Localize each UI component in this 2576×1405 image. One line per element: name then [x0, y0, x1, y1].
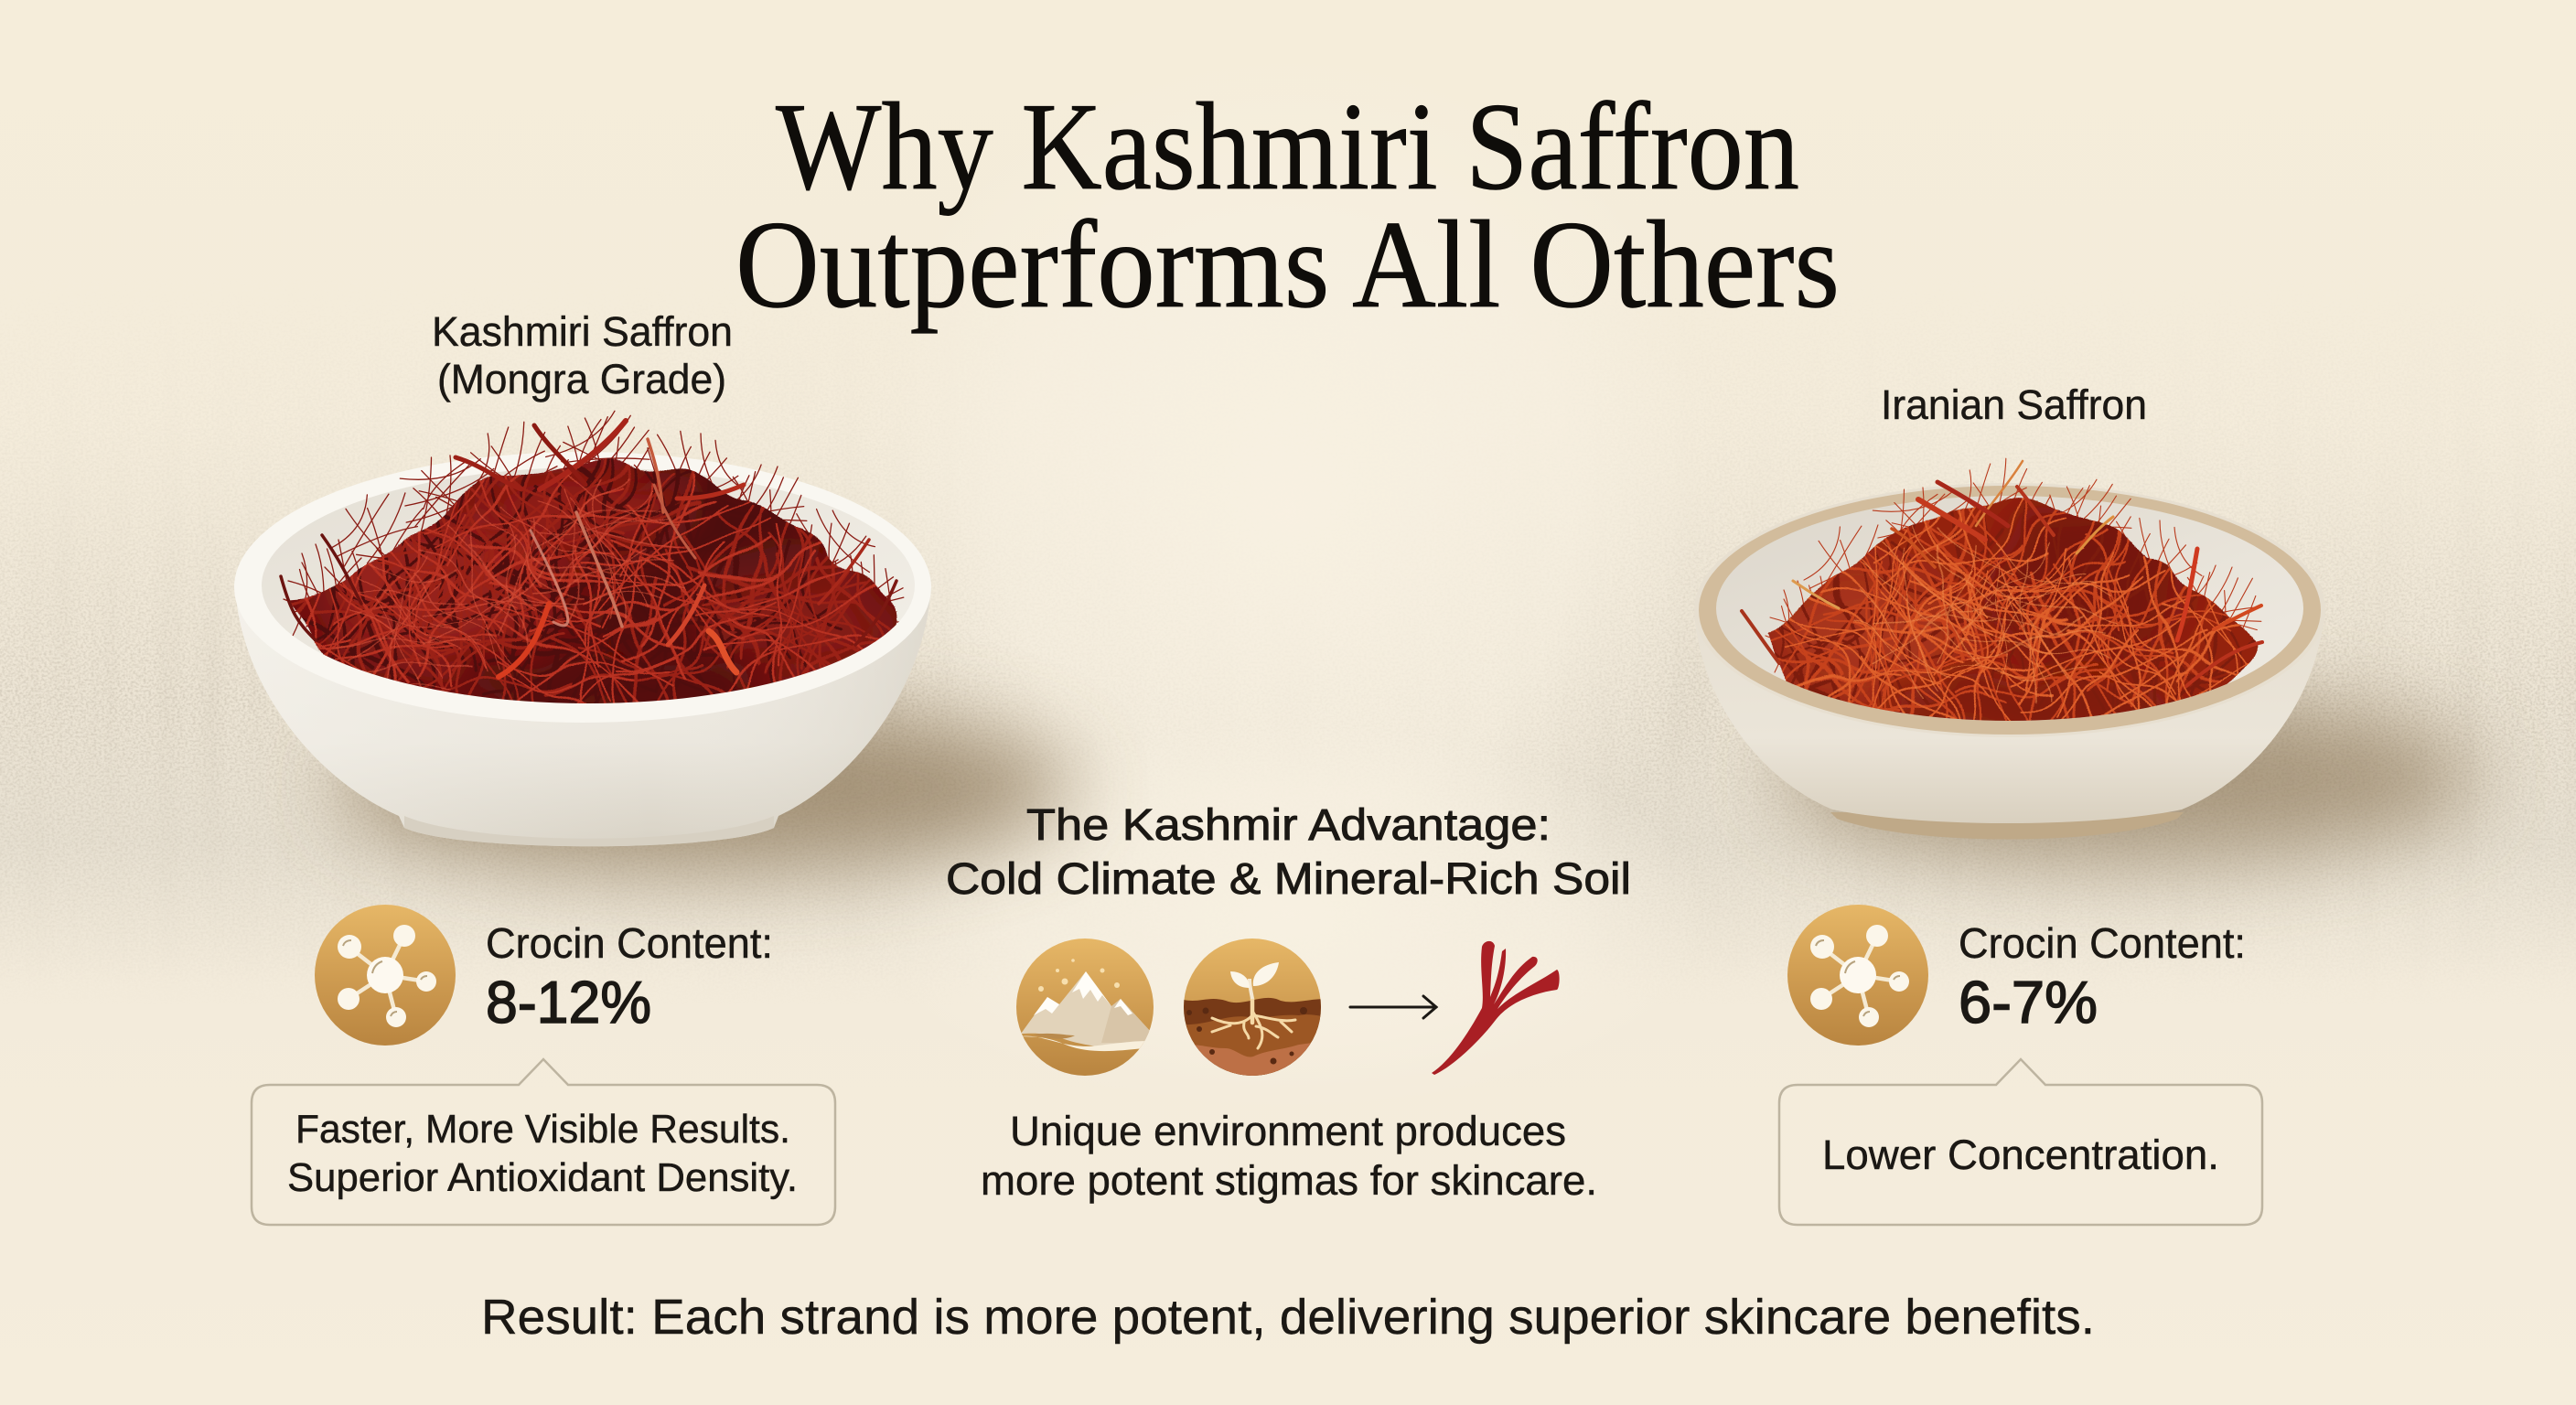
shadow: left bowl — [338, 704, 1070, 869]
title: Why Kashmiri Saffron — [776, 77, 1799, 216]
body text: environment: Unique environment produces — [1010, 1108, 1566, 1154]
saffron pile: Kashmiri — [279, 410, 904, 703]
saffron pile: Iranian — [1740, 457, 2264, 721]
callout: Kashmiri benefits — [252, 1059, 835, 1225]
crocin stat: Kashmiri: Crocin Content: — [486, 919, 773, 967]
crocin stat: Iranian: Crocin Content: — [1959, 919, 2246, 967]
shadow: right bowl — [1784, 695, 2479, 860]
label: Kashmiri Saffron: (Mongra Grade) — [437, 356, 726, 402]
photo: white bowl with Kashmiri saffron — [234, 410, 931, 847]
icon: saffron stigma — [1432, 941, 1560, 1075]
protruding strands: Kashmiri — [281, 421, 896, 677]
arrow — [1350, 996, 1436, 1018]
icon: molecule gold right — [1787, 905, 1928, 1046]
icon: snowy mountain — [1016, 938, 1154, 1076]
crocin stat: Kashmiri — [315, 905, 773, 1046]
result statement: Result: Each strand is more potent, delivering superior skincare benefits. — [481, 1290, 2095, 1345]
body text: environment — [981, 1108, 1597, 1204]
callout: Iranian — [1779, 1059, 2262, 1225]
heading: The Kashmir Advantage: Cold Climate & Mineral-Rich Soil — [946, 855, 1631, 904]
background: linen tablecloth — [0, 413, 2576, 971]
photo: ceramic bowl with Iranian saffron — [1694, 457, 2325, 840]
label: Kashmiri Saffron — [432, 308, 733, 402]
callout: Kashmiri benefits: Faster, More Visible Results. — [295, 1107, 790, 1152]
body text: environment: more potent stigmas for skincare. — [981, 1157, 1597, 1204]
callout: Kashmiri benefits: Superior Antioxidant Density. — [287, 1155, 798, 1200]
title: Outperforms All Others — [735, 195, 1840, 334]
callout: Iranian: Lower Concentration. — [1822, 1132, 2219, 1178]
protruding strands: Iranian — [1742, 461, 2262, 686]
crocin stat: Kashmiri: 8-12% — [486, 969, 651, 1035]
heading: The Kashmir Advantage: The Kashmir Advantage: — [1026, 801, 1551, 850]
crocin stat: Iranian: 6-7% — [1959, 969, 2098, 1035]
label: Iranian Saffron: Iranian Saffron — [1881, 381, 2147, 428]
label: Kashmiri Saffron: Kashmiri Saffron — [432, 308, 733, 355]
crocin stat: Iranian — [1787, 905, 2246, 1046]
icon: plant roots in soil — [1180, 938, 1326, 1079]
icon: molecule gold — [315, 905, 456, 1046]
heading: The Kashmir Advantage — [946, 801, 1631, 904]
title — [735, 77, 1840, 334]
